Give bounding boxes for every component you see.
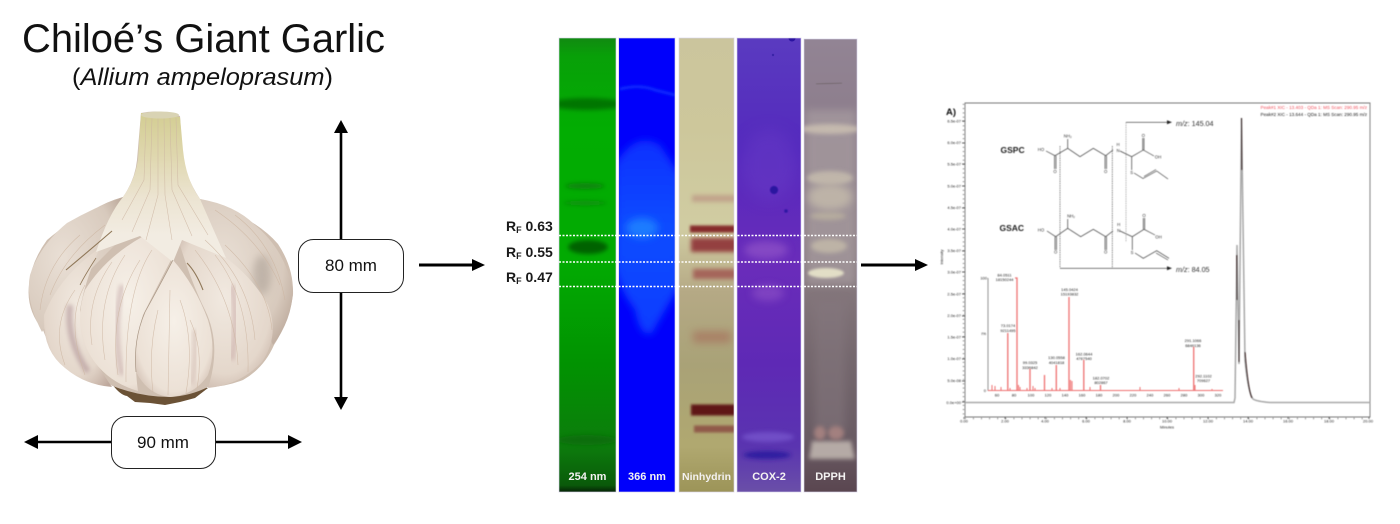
mass spectrum inset: 80 — [1012, 392, 1017, 398]
TLC strip: DPPH — [804, 39, 857, 492]
y axis labels: 3.0e-07 — [947, 270, 962, 274]
mass spectrum inset: 240 — [1147, 392, 1154, 398]
mass spectrum inset: 140 — [1062, 392, 1069, 398]
RF labels: F — [516, 225, 522, 235]
TLC strip: Ninhydrin — [679, 38, 740, 492]
strip edges — [559, 38, 857, 492]
mass spectrum inset: 260 — [1164, 392, 1171, 398]
spectrum peak labels: 3336842 — [1022, 365, 1039, 370]
width dimension arrow — [24, 435, 302, 449]
TLC strip: COX-2 — [737, 34, 801, 492]
spectrum peak labels: 4041818 — [1049, 360, 1065, 365]
fragment arrow: m/z 145.04 — [1126, 119, 1214, 128]
structure atom labels: HO — [1038, 228, 1045, 232]
TLC strip: 366 nm — [619, 38, 675, 492]
y axis labels: 1.5e-07 — [947, 334, 962, 340]
spectrum peak labels: 99.0325 — [1023, 360, 1038, 365]
RF labels: 0.55 — [522, 244, 553, 260]
peak legend: Peak#1 XIC - 13.403 - QDa 1: MS Scan: 290.95 m/z — [1261, 105, 1368, 110]
plot frame — [965, 103, 1370, 417]
fragmentation cut lines — [1060, 122, 1126, 268]
mass spectrum inset: 100 — [1028, 392, 1035, 398]
structure atom labels: OH — [1155, 154, 1161, 160]
spectrum peaks — [988, 278, 1223, 390]
label: 90 mm: 90 mm — [137, 433, 189, 452]
x axis labels: 12.00 — [1203, 418, 1214, 424]
spectrum peak labels: 291.1066 — [1185, 338, 1202, 343]
GSAC skeleton — [1047, 218, 1169, 260]
x axis labels: 10.00 — [1162, 418, 1173, 424]
x axis labels: 14.00 — [1243, 418, 1254, 424]
y axis labels: Intensity — [939, 250, 944, 264]
structure atom labels: S — [1130, 170, 1133, 175]
spectrum peak labels: 130.0558 — [1048, 355, 1066, 360]
y axis labels: 6.5e-07 — [947, 118, 962, 124]
y axis labels: 1.0e-07 — [947, 356, 962, 361]
x axis labels — [960, 418, 1374, 430]
y axis labels: 5.0e-07 — [947, 184, 962, 188]
mass spectrum inset: 0 — [984, 388, 987, 393]
structure atom labels: OH — [1155, 234, 1162, 240]
mass spectrum inset: I% — [981, 331, 986, 336]
spectrum peak labels: 84.0511 — [997, 272, 1012, 278]
structure atom labels: N — [1116, 148, 1120, 153]
compound name: GSPC: GSPC — [1000, 145, 1025, 155]
RF labels: F — [516, 276, 522, 286]
arrow: garlic to TLC — [419, 259, 485, 271]
x axis labels: 6.00 — [1082, 418, 1091, 424]
RF marker lines — [559, 236, 857, 286]
spectrum peak labels: 15193832 — [1061, 292, 1079, 296]
structure atom labels: O — [1104, 250, 1108, 254]
fragment arrow: m/z 84.05: m/z: 84.05 — [1176, 265, 1210, 274]
subtitle: species name: (Allium ampeloprasum ) — [72, 64, 333, 91]
skin fibres — [40, 118, 285, 395]
arrow: TLC to chromatogram — [861, 259, 928, 271]
strip labels: COX-2 — [752, 471, 786, 483]
mass spectrum inset: 100 — [980, 276, 988, 280]
structure atom labels: O — [1053, 169, 1057, 174]
panel: TLC plates — [549, 34, 860, 492]
spectrum peak labels: 182.0702 — [1093, 376, 1110, 380]
chart: chromatogram — [939, 103, 1374, 430]
y axis labels — [939, 118, 962, 405]
mass spectrum inset: 200 — [1113, 392, 1120, 398]
structure atom labels: O — [1142, 133, 1146, 138]
structures: GSPC and GSAC — [1000, 119, 1214, 274]
y axis labels: 3.5e-07 — [947, 248, 962, 253]
x axis labels: 8.00 — [1123, 418, 1132, 424]
mass spectrum inset: 160 — [1079, 392, 1086, 398]
label: 80 mm: 80 mm — [325, 256, 377, 275]
height dimension arrow — [334, 120, 348, 410]
compound name: GSAC: GSAC — [1000, 223, 1024, 233]
spectrum peak labels: 6846136 — [1185, 343, 1202, 348]
mass spectrum inset: 300 — [1198, 392, 1205, 398]
structure atom labels: S — [1131, 250, 1134, 255]
spectrum peak labels: 709627 — [1197, 378, 1211, 383]
spectrum peak labels: 18150244 — [996, 277, 1014, 282]
y axis labels: 4.0e-07 — [947, 226, 962, 232]
x axis labels: 2.00 — [1001, 418, 1010, 424]
RF labels: R — [506, 218, 516, 234]
mass spectrum inset — [980, 272, 1223, 398]
RF labels: 0.47 — [522, 269, 553, 285]
x axis labels: Minutes — [1160, 424, 1174, 430]
RF labels: 0.63 — [522, 218, 553, 234]
strip labels — [569, 471, 846, 483]
strip labels: DPPH — [815, 471, 846, 483]
label: 90 mm — [112, 416, 216, 468]
structure atom labels: N — [1117, 228, 1120, 233]
mass spectrum inset: 180 — [1096, 392, 1103, 398]
strip labels: Ninhydrin — [682, 471, 731, 483]
TLC strip: 254 nm — [559, 38, 616, 492]
clove gaps — [66, 231, 203, 290]
spectrum peak labels: 292.1102 — [1195, 374, 1212, 378]
mass spectrum inset: 320 — [1215, 392, 1222, 398]
spectrum peak labels: 73.0174 — [1001, 323, 1016, 328]
peak legend — [1261, 105, 1368, 117]
y axis labels: 5.0e-08 — [947, 378, 962, 383]
chromatogram trace — [965, 118, 1370, 402]
structure atom labels: O — [1104, 169, 1108, 174]
fragment arrow: m/z 84.05 — [1060, 265, 1210, 274]
title: Chiloé’s Giant Garlic — [22, 17, 385, 61]
mass spectrum inset: 60 — [995, 392, 1000, 398]
x axis labels: 0.00 — [960, 418, 969, 424]
spectrum peak labels: 145.0424 — [1061, 287, 1079, 292]
icon: garlic bulb — [29, 112, 293, 405]
x axis labels: 18.00 — [1324, 418, 1335, 424]
spectrum peak labels: 802867 — [1094, 380, 1108, 385]
structure atom labels: HO — [1038, 147, 1045, 152]
GSPC skeleton — [1046, 138, 1168, 179]
spectrum peak labels: 4767540 — [1076, 356, 1093, 361]
mass spectrum inset: 120 — [1045, 392, 1052, 398]
RF labels — [506, 218, 553, 286]
x axis labels: 20.00 — [1363, 418, 1374, 424]
mass spectrum inset: 220 — [1130, 392, 1137, 398]
mass spectrum inset: 280 — [1181, 392, 1188, 398]
structure atom labels: NH₂ — [1067, 214, 1075, 218]
fragment arrow: m/z 145.04: m/z: 145.04 — [1176, 119, 1214, 128]
pink streaks — [69, 285, 235, 385]
structure atom labels — [1038, 133, 1162, 255]
structure atom labels: H — [1117, 222, 1120, 227]
y axis labels: 2.5e-07 — [947, 292, 962, 296]
peak legend: Peak#2 XIC - 13.644 - QDa 1: MS Scan: 290.95 m/z — [1261, 112, 1368, 117]
spectrum peak labels: 9211495 — [1000, 328, 1016, 333]
label: 80 mm — [298, 240, 404, 292]
RF labels: F — [516, 251, 522, 261]
panel letter: A) — [946, 107, 956, 118]
spectrum peak labels: 162.0644 — [1076, 352, 1093, 356]
strip labels: 366 nm — [628, 471, 666, 483]
x axis labels: 4.00 — [1041, 418, 1050, 424]
x axis labels: 16.00 — [1283, 418, 1294, 424]
RF labels: R — [506, 244, 516, 260]
y axis labels: 4.5e-07 — [947, 205, 962, 210]
strip labels: 254 nm — [569, 471, 607, 483]
spectrum peak labels — [996, 272, 1212, 385]
RF labels: R — [506, 269, 516, 285]
structure atom labels: NH₂ — [1064, 134, 1072, 138]
y axis labels: 2.0e-07 — [947, 313, 962, 318]
structure atom labels: O — [1142, 213, 1146, 218]
y axis labels: 0.0e+00 — [946, 400, 962, 405]
structure atom labels: O — [1054, 250, 1058, 254]
structure atom labels: H — [1116, 142, 1120, 147]
y axis labels: 5.5e-07 — [947, 162, 962, 166]
y axis labels: 6.0e-07 — [947, 140, 962, 145]
